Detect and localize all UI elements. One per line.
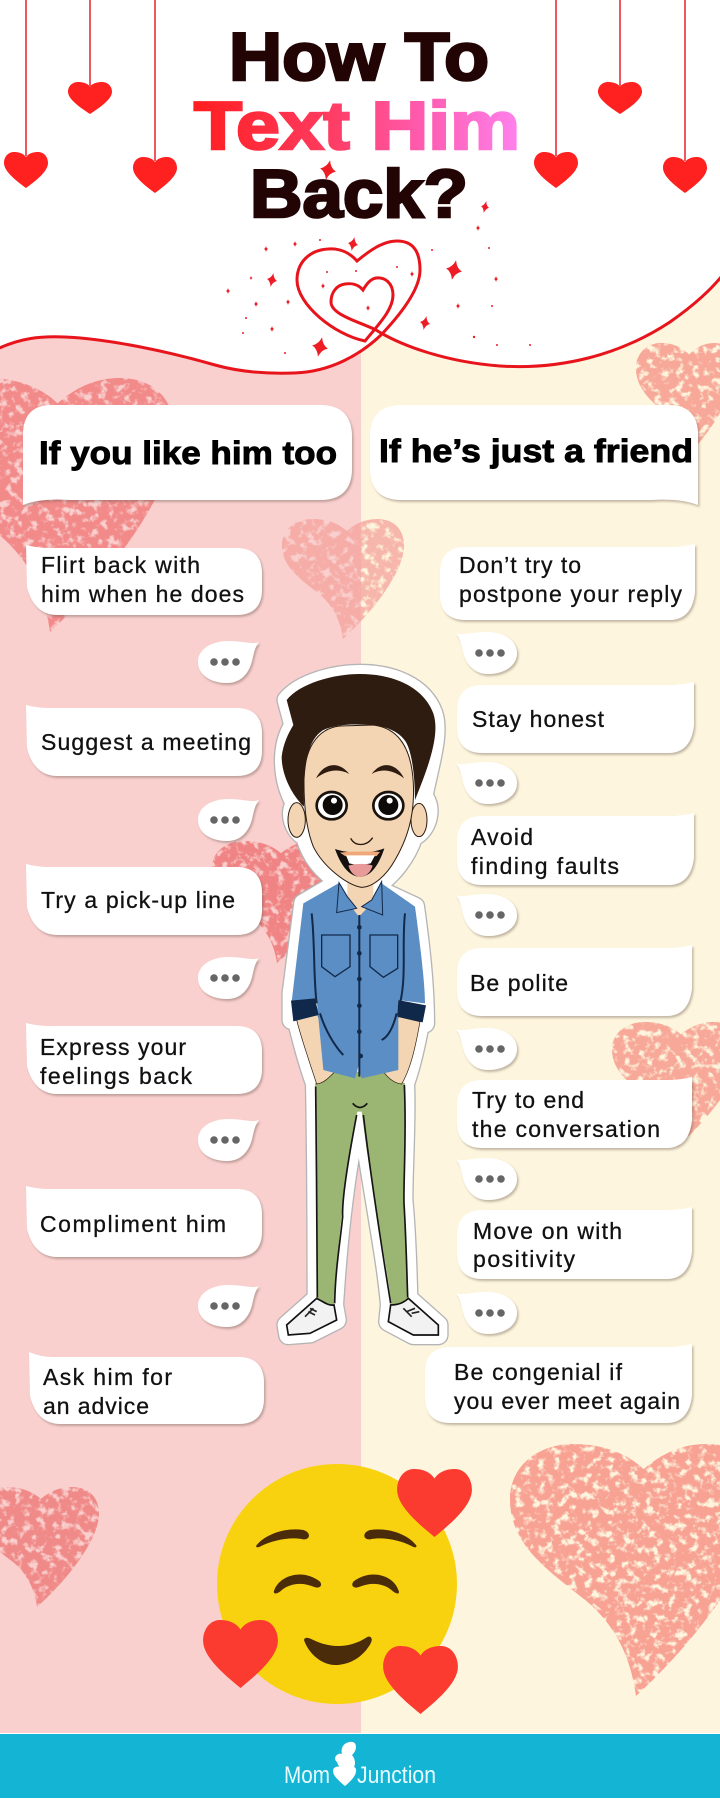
footer bar [0, 1734, 720, 1798]
left bubble: flirt back: Flirt back with [41, 552, 200, 578]
right typing bubble 5 [456, 1158, 517, 1200]
right bubble: move on: positivity [473, 1246, 576, 1272]
nose [351, 838, 373, 845]
faded textured hearts [0, 343, 720, 1696]
right bubble: avoid finding faults: finding faults [471, 853, 619, 879]
right bubble: move on [457, 1207, 692, 1279]
eyebrows [316, 765, 404, 778]
right typing bubble 1 [456, 632, 517, 674]
panel: right cream background [361, 250, 720, 1733]
title: Back? [250, 156, 468, 232]
panel heading: if you like him too [23, 405, 352, 505]
right bubble: be polite: Be polite [470, 970, 568, 996]
wave line and looping heart outline [0, 241, 720, 373]
left typing bubble 3 [198, 957, 259, 999]
cuffs [291, 998, 426, 1022]
hanging hearts left [4, 0, 177, 193]
shirt [292, 883, 425, 1078]
title: Text Him [194, 88, 520, 164]
left bubble: suggest a meeting [26, 705, 262, 776]
panel heading: if you like him too: If you like him too [39, 435, 337, 471]
left bubble: suggest a meeting: Suggest a meeting [41, 729, 251, 755]
right bubble: end the conversation: the conversation [472, 1116, 660, 1142]
right bubble: end the conversation: Try to end [472, 1087, 584, 1113]
right typing bubble 4 [456, 1028, 517, 1070]
logo: MomJunction: Mom [284, 1762, 330, 1789]
right bubble: don't postpone: Don’t try to [459, 552, 581, 578]
character: smiling man with sticker outline [282, 674, 438, 1335]
eyes [317, 792, 347, 819]
right bubble: don't postpone [440, 544, 695, 620]
left bubble: pick-up line: Try a pick-up line [41, 887, 235, 913]
right bubble: be congenial [425, 1344, 692, 1423]
left bubble: flirt back [26, 545, 262, 615]
panel: left pink background [0, 250, 361, 1733]
left bubble: compliment him [26, 1186, 262, 1257]
trousers [315, 1072, 408, 1305]
right bubble: avoid finding faults [457, 813, 694, 885]
logo: MomJunction: Junction [357, 1762, 436, 1789]
left typing bubble 1 [198, 641, 259, 683]
right bubble: be congenial: Be congenial if [454, 1359, 623, 1385]
panel heading: if he's just a friend: If he’s just a friend [379, 433, 693, 469]
arms [297, 1013, 335, 1084]
ears [288, 803, 305, 837]
right bubble: end the conversation [457, 1077, 692, 1148]
right typing bubble 3 [456, 894, 517, 936]
right bubble: stay honest [457, 682, 694, 753]
mouth [335, 848, 384, 877]
left bubble: compliment him: Compliment him [40, 1211, 226, 1237]
right typing bubble 6 [456, 1292, 517, 1334]
right bubble: don't postpone: postpone your reply [459, 581, 682, 607]
left typing bubble 4 [198, 1119, 259, 1161]
left bubble: express your feelings: feelings back [40, 1063, 192, 1089]
neck [347, 880, 373, 917]
shoes [287, 1298, 337, 1335]
right bubble: be polite [457, 945, 692, 1016]
collar [337, 882, 383, 915]
left bubble: flirt back: him when he does [41, 581, 244, 607]
left bubble: ask him for advice: Ask him for [43, 1364, 172, 1390]
hanging hearts right [534, 0, 707, 193]
title [194, 19, 520, 232]
hair [282, 674, 435, 807]
left bubble: express your feelings: Express your [40, 1034, 186, 1060]
left typing bubble 5 [198, 1285, 259, 1327]
left bubble: ask him for advice [29, 1352, 264, 1424]
title: How To [229, 19, 489, 95]
right bubble: avoid finding faults: Avoid [471, 824, 533, 850]
right typing bubble 2 [456, 762, 517, 804]
left bubble: ask him for advice: an advice [43, 1393, 149, 1419]
right bubble: be congenial: you ever meet again [454, 1388, 680, 1414]
left typing bubble 2 [198, 799, 259, 841]
logo: MomJunction [284, 1742, 436, 1789]
left bubble: pick-up line [26, 864, 262, 935]
sparkles around heart [226, 159, 531, 358]
face [304, 725, 414, 887]
emoji: smiling face with hearts [203, 1464, 472, 1714]
right bubble: stay honest: Stay honest [472, 706, 605, 732]
left bubble: express your feelings [26, 1023, 262, 1094]
right bubble: move on: Move on with [473, 1218, 622, 1244]
panel heading: if he's just a friend [370, 405, 698, 505]
